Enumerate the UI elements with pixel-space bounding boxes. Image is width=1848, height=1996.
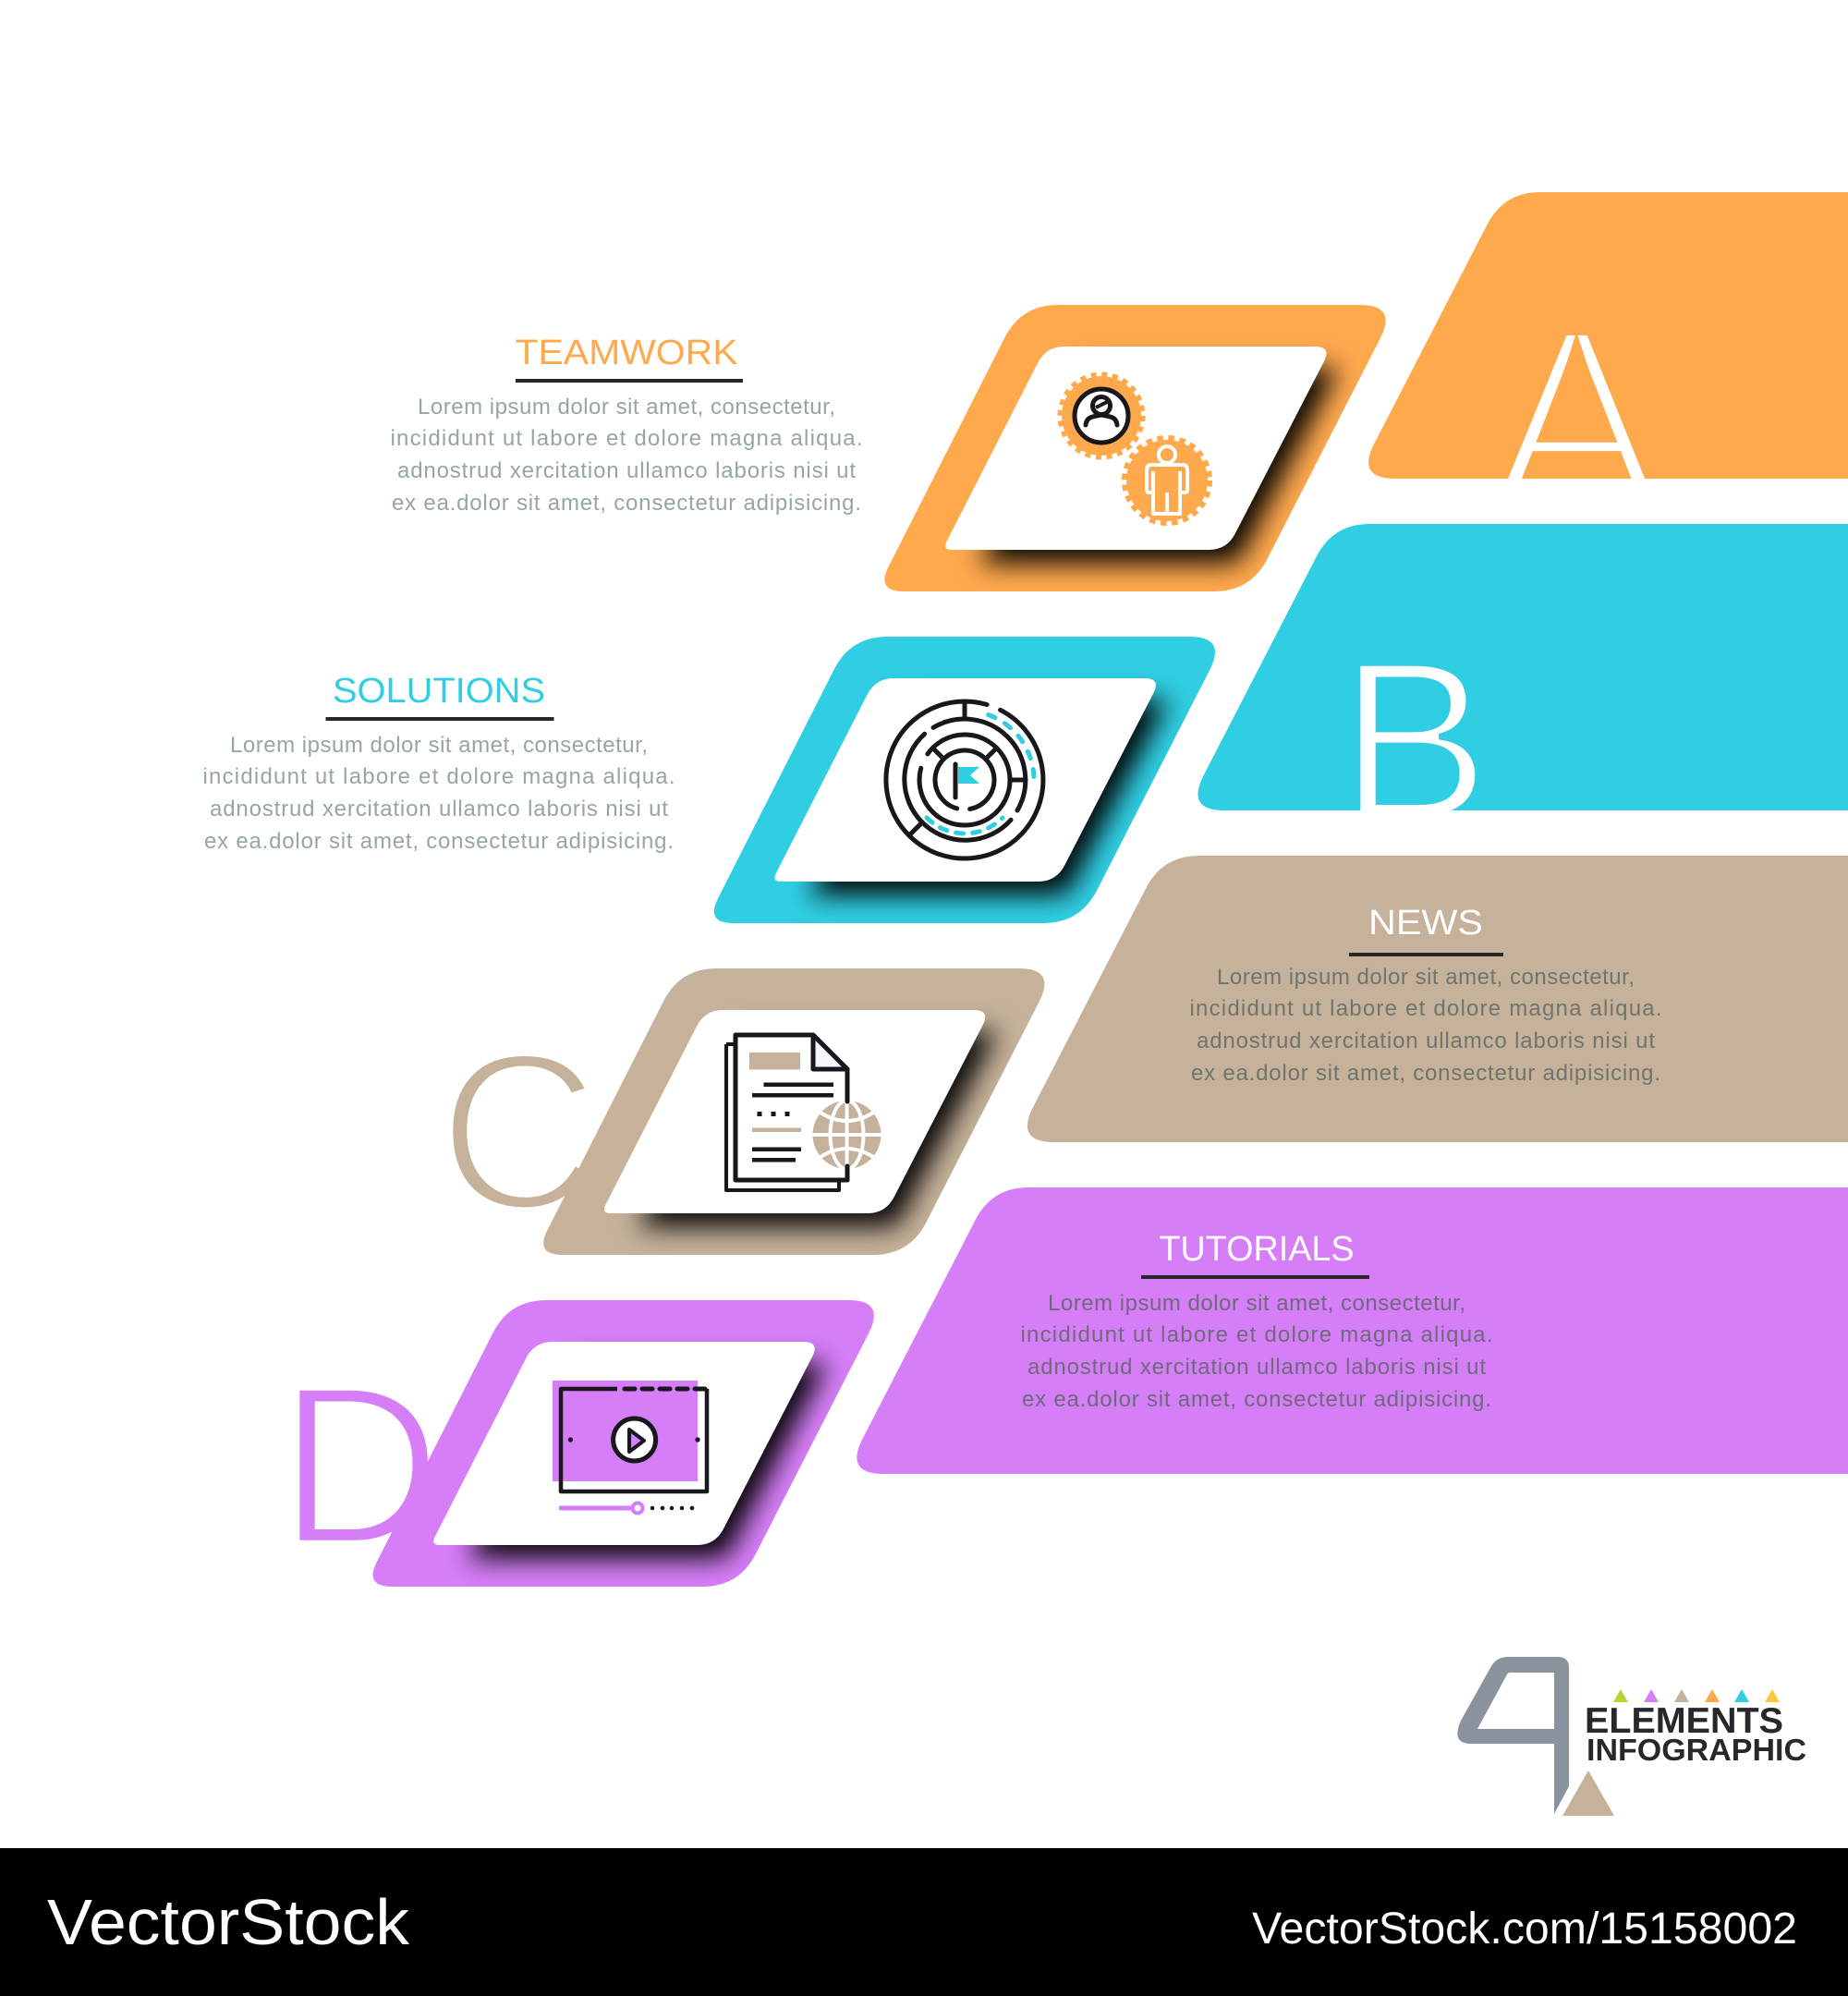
- logo word elements: ELEMENTS: [1585, 1701, 1783, 1741]
- heading: news: NEWS: [1368, 904, 1483, 943]
- text block: teamwork: incididunt ut labore et dolore magna aliqua.: [390, 426, 863, 451]
- text block: news: ex ea.dolor sit amet, consectetur adipisicing.: [1191, 1061, 1660, 1086]
- logo: 4 elements infographic: [1457, 1657, 1806, 1816]
- letter B: B: [1339, 614, 1489, 867]
- letter C: C: [438, 1007, 600, 1257]
- icon: teamwork gears: [1061, 375, 1210, 523]
- heading: teamwork: TEAMWORK: [516, 334, 737, 372]
- icon: maze with flag: [886, 701, 1043, 858]
- text block: news: Lorem ipsum dolor sit amet, consectetur,: [1217, 965, 1635, 990]
- panel: tutorials frame: [373, 1300, 874, 1587]
- footer url: VectorStock.com/15158002: [1252, 1905, 1797, 1953]
- text block: teamwork: [390, 334, 863, 516]
- logo large triangle: [1562, 1771, 1614, 1816]
- logo small triangles: [1613, 1689, 1780, 1702]
- text block: solutions: ex ea.dolor sit amet, consectetur adipisicing.: [204, 829, 674, 854]
- panel: solutions frame: [714, 637, 1215, 923]
- text block: news: adnostrud xercitation ullamco laboris nisi ut: [1197, 1028, 1655, 1053]
- panel: teamwork frame: [884, 305, 1386, 591]
- text block: teamwork: Lorem ipsum dolor sit amet, consectetur,: [418, 395, 835, 420]
- text block: tutorials: adnostrud xercitation ullamco laboris nisi ut: [1027, 1355, 1486, 1380]
- text block: tutorials: Lorem ipsum dolor sit amet, consectetur,: [1048, 1291, 1465, 1316]
- text block: solutions: adnostrud xercitation ullamco laboris nisi ut: [210, 797, 668, 822]
- text block: teamwork: adnostrud xercitation ullamco laboris nisi ut: [397, 458, 856, 483]
- bar C: [1027, 856, 1848, 1142]
- text block: tutorials: ex ea.dolor sit amet, consectetur adipisicing.: [1022, 1387, 1491, 1412]
- text block: solutions: Lorem ipsum dolor sit amet, consectetur,: [230, 733, 648, 758]
- letter D: D: [278, 1338, 442, 1591]
- bar D: [857, 1187, 1848, 1474]
- text block: tutorials: incididunt ut labore et dolore magna aliqua.: [1020, 1322, 1493, 1347]
- bar B with letter: [1198, 524, 1848, 810]
- panel: news frame: [543, 968, 1044, 1255]
- logo numeral 4: [1457, 1657, 1569, 1814]
- footer brand: VectorStock: [47, 1886, 410, 1958]
- text block: tutorials: [1020, 1230, 1493, 1412]
- heading: solutions: SOLUTIONS: [333, 672, 545, 711]
- text block: news: incididunt ut labore et dolore magna aliqua.: [1190, 996, 1661, 1021]
- text block: news: [1190, 904, 1661, 1086]
- logo word infographic: INFOGRAPHIC: [1587, 1733, 1806, 1767]
- heading: tutorials: TUTORIALS: [1159, 1230, 1355, 1269]
- icon: video player: [553, 1381, 707, 1514]
- text block: solutions: incididunt ut labore et dolore magna aliqua.: [203, 764, 675, 789]
- icon: document with globe: [726, 1035, 881, 1190]
- letter A: A: [1490, 275, 1664, 564]
- bar A with letter: [1368, 192, 1848, 479]
- text block: solutions: [203, 672, 675, 854]
- text block: teamwork: ex ea.dolor sit amet, consectetur adipisicing.: [392, 491, 861, 516]
- footer bar: [0, 1848, 1848, 1996]
